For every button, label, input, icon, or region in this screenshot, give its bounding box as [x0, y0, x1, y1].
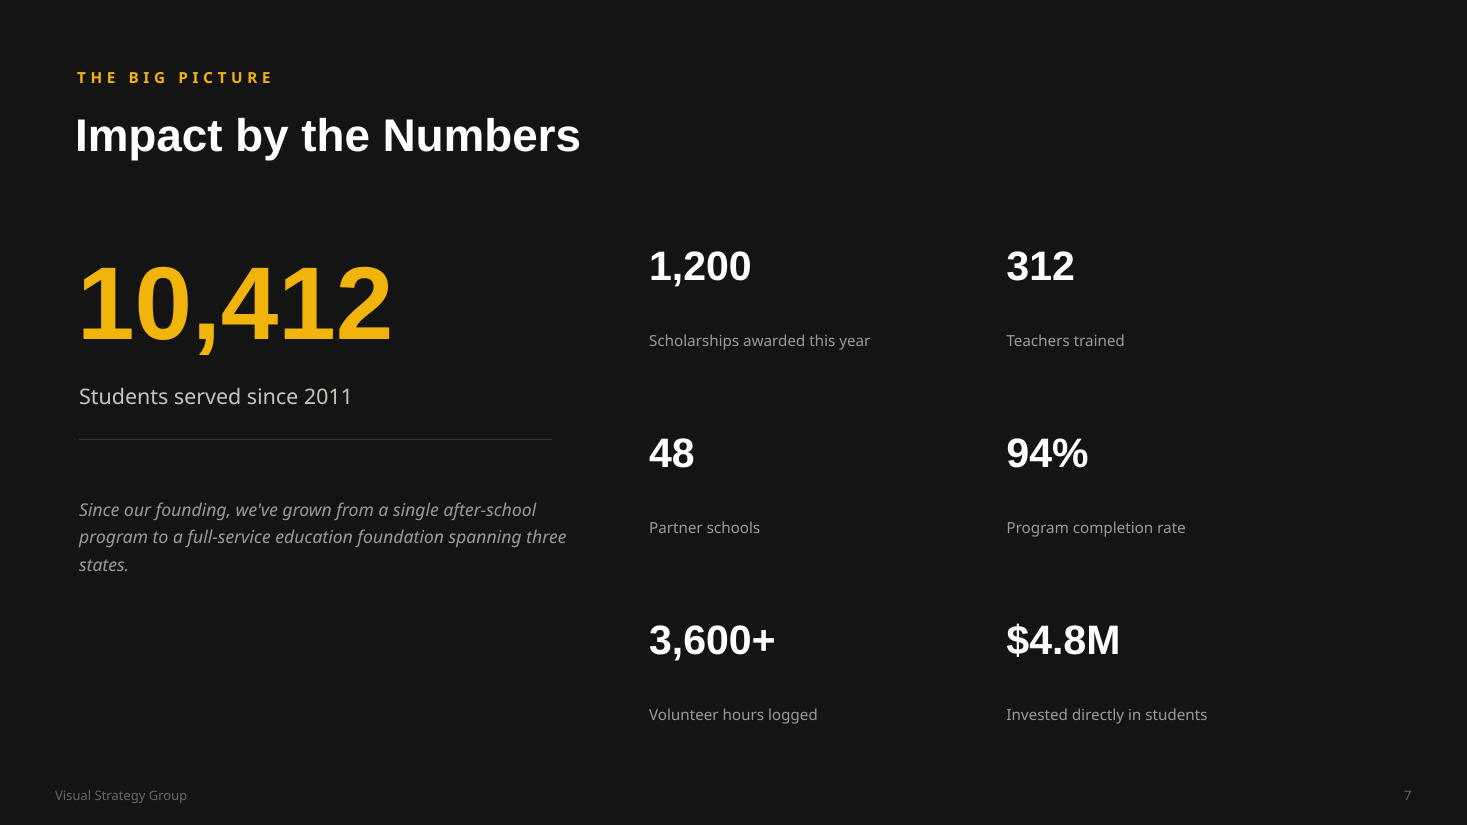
- label: Volunteer hours logged: [649, 705, 818, 725]
- value: $4.8M: [1006, 617, 1120, 663]
- title: Impact by the Numbers: [75, 110, 581, 161]
- description paragraph: states.: [79, 553, 129, 577]
- description paragraph: [78, 498, 566, 577]
- eyebrow label: THE BIG PICTURE: [77, 68, 275, 88]
- stat: invested: [1006, 617, 1207, 725]
- label: Teachers trained: [1006, 331, 1125, 351]
- value: 1,200: [649, 243, 752, 289]
- divider: [79, 439, 552, 440]
- value: 48: [649, 430, 695, 476]
- value: 94%: [1006, 430, 1088, 476]
- stat: partner schools: [649, 430, 760, 538]
- description paragraph: Since our founding, we've grown from a single after-school: [79, 498, 536, 522]
- hero stat: number: 10,412: [77, 245, 393, 361]
- stat: volunteer hours: [649, 617, 818, 725]
- value: 3,600+: [649, 617, 776, 663]
- label: Scholarships awarded this year: [649, 331, 870, 351]
- stat: teachers: [1006, 243, 1125, 351]
- value: 312: [1006, 243, 1075, 289]
- label: Invested directly in students: [1006, 705, 1207, 725]
- stat: completion rate: [1006, 430, 1186, 538]
- footer: organisation: Visual Strategy Group: [55, 786, 187, 804]
- stat: scholarships: [649, 243, 870, 351]
- hero stat: caption: Students served since 2011: [79, 382, 353, 411]
- description paragraph: program to a full-service education foundation spanning three: [79, 525, 566, 549]
- label: Partner schools: [649, 518, 760, 538]
- label: Program completion rate: [1006, 518, 1186, 538]
- footer: page number: 7: [1404, 786, 1411, 804]
